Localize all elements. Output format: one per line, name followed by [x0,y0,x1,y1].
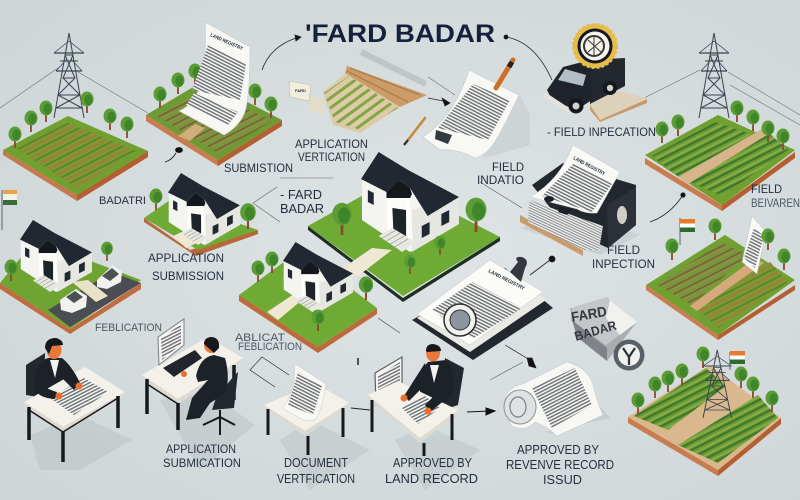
icon: fard badar stamp [570,297,644,370]
arrow: desk to desk [351,408,370,410]
panel: striped plot with sign [289,52,427,133]
icon: power tower [54,33,84,118]
keyboard [163,350,202,377]
document [742,216,766,274]
icon: orange pen [496,60,513,88]
power lines [0,68,800,125]
icon: car [97,265,122,289]
label: field inpection: INPECTION [592,257,655,271]
person arms [400,363,450,414]
label: application submission [148,251,224,283]
label: field indatio: FIELD [492,162,524,174]
label: fard badar: - FARD [280,187,322,202]
trees [150,188,256,229]
arrow: clipboard to scroll [490,345,536,380]
label: field beivaren: FIELD [751,184,782,196]
trees [154,64,278,118]
label: approved by revenve record issud: APPROVED BY [517,443,600,457]
label: approved by revenve record issud: REVENVE RECORD [506,458,614,472]
icon: flag [730,351,745,370]
label: application submission: APPLICATION [148,251,224,265]
label: document vertfication: VERTFICATION [277,472,355,486]
trees [4,242,113,281]
label: ablicat feblication: ABLICAT [235,332,285,344]
label: submistion: SUBMISTION [224,163,293,175]
label: fard badar [280,187,324,216]
label: field inpection: FIELD [607,243,640,257]
arrow: small blob [165,148,182,162]
icon: fard badar stamp: BADAR [573,317,619,344]
arrow: small blob near plot [428,77,455,106]
trees [656,100,790,150]
monitor [158,319,184,365]
label: application vertication [295,139,368,164]
panel: central mansion on lawn [308,152,500,302]
paper stack [528,200,603,250]
label: application submication: APPLICATION [166,444,236,456]
person arms [34,358,82,400]
label: document vertfication: DOCUMENT [284,456,348,470]
icon: seal [573,24,617,68]
trees [252,252,373,331]
trees [632,346,778,414]
label: badatri: BADATRI [99,195,146,207]
panel: clerk reading at desk [24,338,132,470]
label: application submication [163,444,241,470]
label: approved by revenve record issud [506,443,614,487]
label: application submission: SUBMISSION [152,269,224,283]
monitor [375,357,402,405]
panel: truck with seal [544,24,647,122]
icon: fard badar stamp: FARD [570,303,608,325]
label: field inpecation: - FIELD INPECATION [547,127,656,139]
sign: FARD [295,88,306,93]
panel: field with power tower (top right) [645,33,795,211]
person torso [420,344,453,410]
panel: clerk typing at computer [142,319,255,470]
icon: flag left [2,190,17,230]
document: land registry sheet: LAND REGISTRY [209,32,244,52]
label: approved by land record: LAND RECORD [385,472,478,486]
desk [24,367,125,462]
panel: small house with lawn (upper) [144,173,258,256]
chair [212,372,238,410]
label: approved by land record: APPROVED BY [393,456,473,470]
arrow: field indatio pointer [480,182,522,208]
panel: field with document [146,22,282,166]
person [34,338,72,398]
label: approved by revenve record issud: ISSUD [543,473,582,487]
panel: field with power tower (top left) [3,33,148,201]
chair [26,353,45,398]
arrow: small pointers [358,318,400,365]
arrow: fard badar pointer [253,178,333,222]
label: application vertication: APPLICATION [295,139,368,151]
document: land registry sheet [179,22,250,135]
arrow: stack to dot [650,193,685,222]
desk [142,337,243,430]
panel: small house with lawn (lower) [239,242,377,353]
panel: field with document and flag [646,216,795,340]
label: field beivaren [751,184,800,210]
icon: clip [510,257,527,282]
panel: field with tower and flag (bottom right) [628,346,781,476]
top sheet: LAND REGISTRY [572,155,606,177]
icon: small pen [404,118,425,145]
label: application vertication: VERTICATION [298,152,365,164]
label: field inpection [592,243,655,271]
chair [443,358,464,410]
arrow: official to scroll [467,408,495,415]
arrow: to title left [262,35,301,70]
document on desk [50,378,108,415]
trees [666,218,790,270]
document [402,396,440,424]
icon: power tower [703,350,732,418]
person [181,337,228,420]
label: field indatio: INDATIO [477,175,524,187]
panel: house with driveway and cars [0,220,141,334]
document [282,364,326,421]
trees [8,92,134,148]
panel: official approving at desk [368,344,480,490]
house [361,152,459,252]
label: feblication: FEBLICATION [95,322,162,334]
arrow: document bracket [250,357,289,387]
label: application submication: SUBMICATION [163,458,241,470]
trees [332,198,486,274]
label: approved by land record [385,456,478,486]
binder box [532,163,636,248]
label: document vertfication [277,456,355,486]
desk [264,383,349,455]
icon: power tower [699,33,729,118]
icon: flag [680,218,695,245]
label: ablicat feblication: FEBLICATION [238,341,302,353]
document: curled sheet with pen [404,60,530,158]
title: 'FARD BADAR [305,20,495,48]
label: fard badar: BADAR [280,201,324,216]
document: seal clipboard: LAND REGISTRY [487,268,526,292]
label: ablicat feblication [235,332,302,353]
panel: scroll document [504,362,610,436]
document: seal clipboard [412,256,555,360]
arrow: title to truck [504,35,552,80]
panel: stacked records [520,145,640,256]
label: field indatio [477,162,524,187]
desk [368,381,458,456]
arrow: clip [530,256,555,275]
panel: desk with document [264,364,370,490]
icon: car [60,289,87,313]
